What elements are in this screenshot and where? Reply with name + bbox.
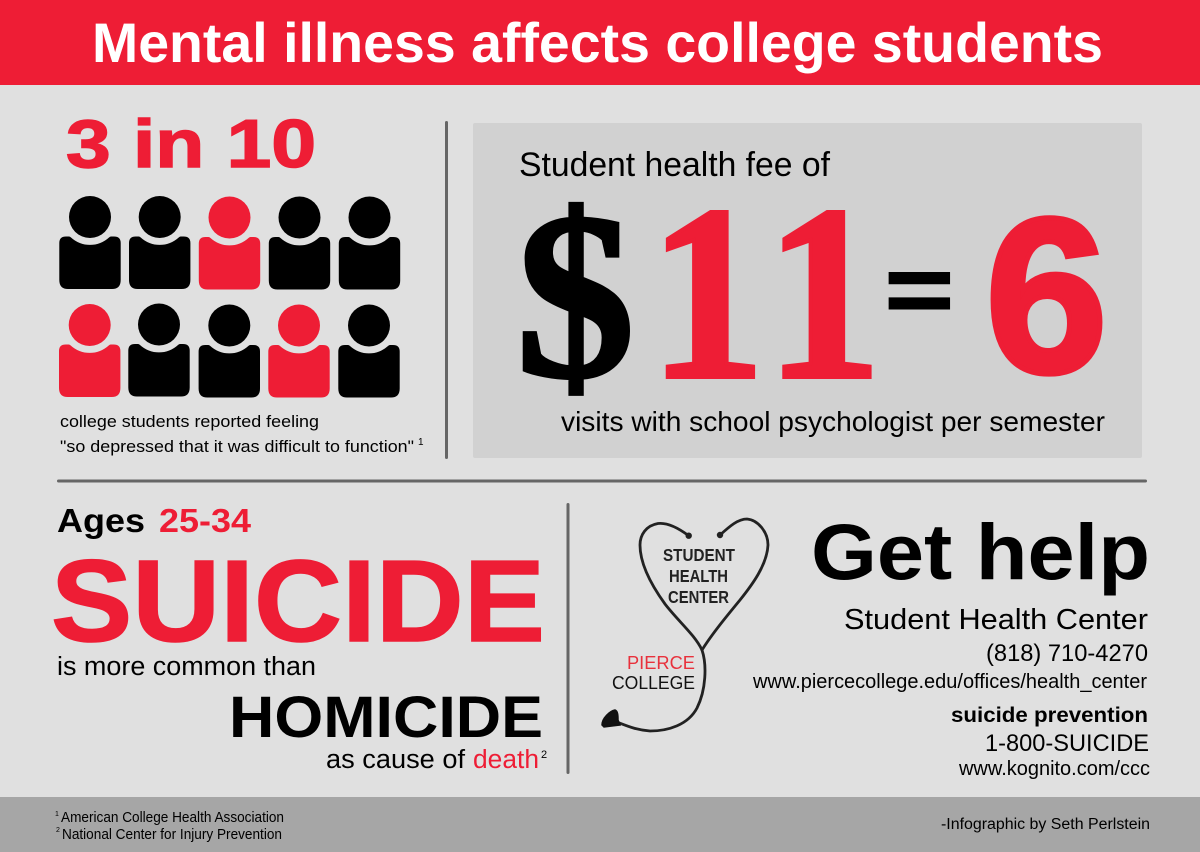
text: footnote sources: 1 [55,811,59,818]
figure: dollar sign: $ [516,165,635,428]
icon: person 2 [129,196,190,289]
text: Pierce College logo: College [612,667,695,695]
text: ages 25-34 [57,502,252,539]
figure: $11 equals 6 [516,155,1108,432]
panel: student health fee [473,123,1142,458]
text: statistic caption: 1 [418,437,424,448]
text: statistic caption [60,412,424,456]
panel: 3 in 10 statistic [59,106,424,456]
text: suicide prevention contact [951,704,1150,780]
icon: person 5 [339,196,400,290]
text: Student Health Center logo: HEALTH [669,566,728,586]
logo: stethoscope heart with Pierce College [602,519,768,731]
text: is more common than: is more common than [57,653,316,681]
heading: homicide: HOMICIDE [229,685,543,750]
text: Student Health Center logo: STUDENT [663,545,735,565]
icon: person 8 [199,304,260,398]
text: footnote sources: National Center for Injury Prevention [62,827,282,843]
text: as cause of death: 2 [541,749,547,761]
heading: suicide: SUICIDE [51,536,545,666]
text: Pierce College logo [612,647,695,695]
text: Student Health Center logo [663,545,735,607]
text: footnote sources: American College Health Association [61,810,284,826]
icon: person 6 red [59,304,120,397]
heading: 3 in 10: 3 in 10 [66,106,316,182]
text: as cause of death: as cause of [326,746,466,774]
panel: suicide versus homicide [51,502,547,774]
footer [0,797,1200,852]
icon: person 4 [269,196,330,290]
text: credit: -Infographic by Seth Perlstein [941,816,1150,833]
icon: person 7 [128,304,190,396]
icon: person 3 red [199,196,260,290]
text: Pierce College logo: Pierce [627,647,695,675]
figure: 11: 1 [649,155,765,432]
text: student health center contact: Student Health Center [844,604,1148,636]
heading: get help: Get help [811,507,1150,596]
text: suicide prevention contact: 1-800-SUICIDE [985,730,1149,757]
text: student health center contact: (818) 710-4270 [986,640,1148,667]
text: suicide prevention contact: suicide prevention [951,704,1148,727]
header banner [0,0,1200,85]
text: statistic caption: "so depressed that it was difficult to function" [60,437,414,456]
text: Student Health Center logo: CENTER [668,587,729,607]
text: statistic caption: college students reported feeling [60,412,319,431]
text: footnote sources [55,810,284,843]
text: suicide prevention contact: www.kognito.com/ccc [958,757,1150,780]
figure: 11: 1 [766,155,882,432]
text: student health center contact: www.piercecollege.edu/offices/health_center [752,671,1147,693]
text: footnote sources: 2 [56,827,60,834]
text: student health center contact [752,604,1148,693]
text: ages 25-34: 25-34 [159,502,252,539]
text: visits per semester: visits with school psychologist per semester [561,406,1105,437]
title: Mental illness affects college students [92,11,1103,74]
icon: stethoscope [602,519,768,731]
figure: equals sign: = [885,237,954,342]
text: ages 25-34: Ages [57,502,145,539]
panel: get help contacts [752,507,1150,780]
figure: 6: 6 [985,172,1108,419]
pictogram: ten students, three red [59,196,400,398]
icon: person 1 [59,196,121,289]
text: student health fee of: Student health fee of [519,146,831,184]
text: as cause of death: death [473,746,539,774]
text: as cause of death [326,746,547,774]
icon: person 10 [338,304,400,398]
icon: person 9 red [268,304,330,398]
